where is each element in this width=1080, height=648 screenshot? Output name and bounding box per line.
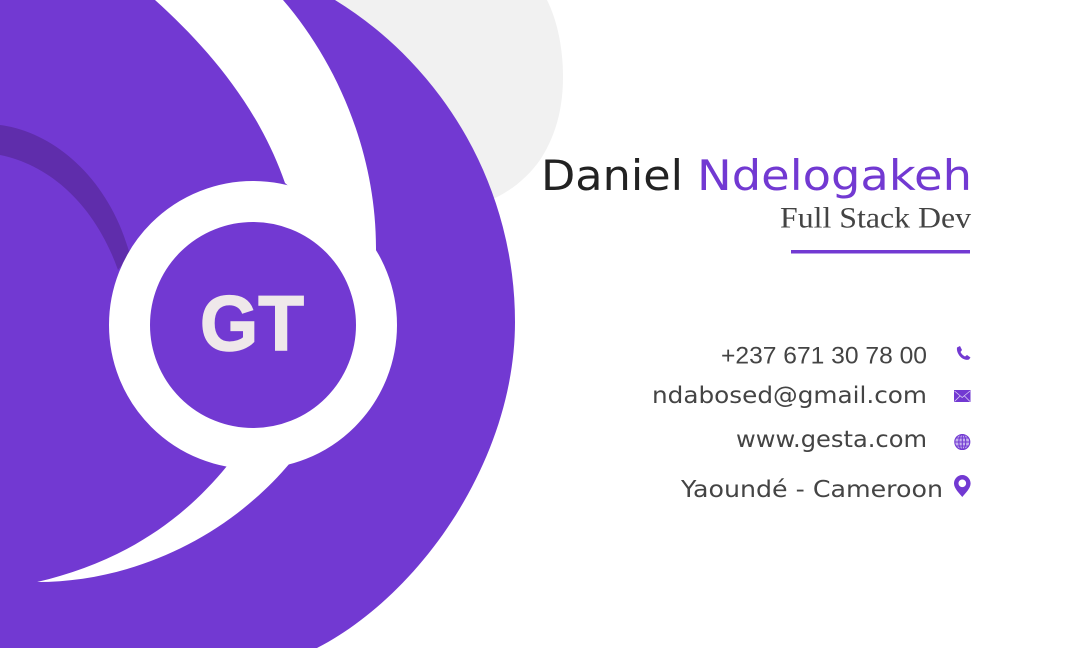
- white swoosh top: [155, 0, 376, 262]
- last name: Ndelogakeh: [697, 151, 972, 200]
- name: [541, 151, 972, 200]
- dark arc accent: [0, 125, 130, 270]
- white swoosh tail: [37, 463, 290, 582]
- icon: phone: [957, 346, 970, 360]
- icon: globe: [955, 434, 970, 450]
- large purple circle: [0, 0, 515, 648]
- email: ndabosed@gmail.com: [652, 383, 927, 409]
- logo ring: [130, 202, 376, 448]
- website: www.gesta.com: [736, 427, 927, 453]
- location: Yaoundé - Cameroon: [680, 477, 943, 503]
- icon: location pin: [954, 475, 971, 497]
- underline: [791, 250, 970, 254]
- icon: mail: [954, 390, 970, 402]
- logo initials: GT: [200, 279, 304, 367]
- phone number: +237 671 30 78 00: [721, 342, 927, 370]
- grey background circle: [330, 0, 563, 198]
- first name: Daniel: [541, 151, 683, 200]
- job title: Full Stack Dev: [780, 202, 971, 234]
